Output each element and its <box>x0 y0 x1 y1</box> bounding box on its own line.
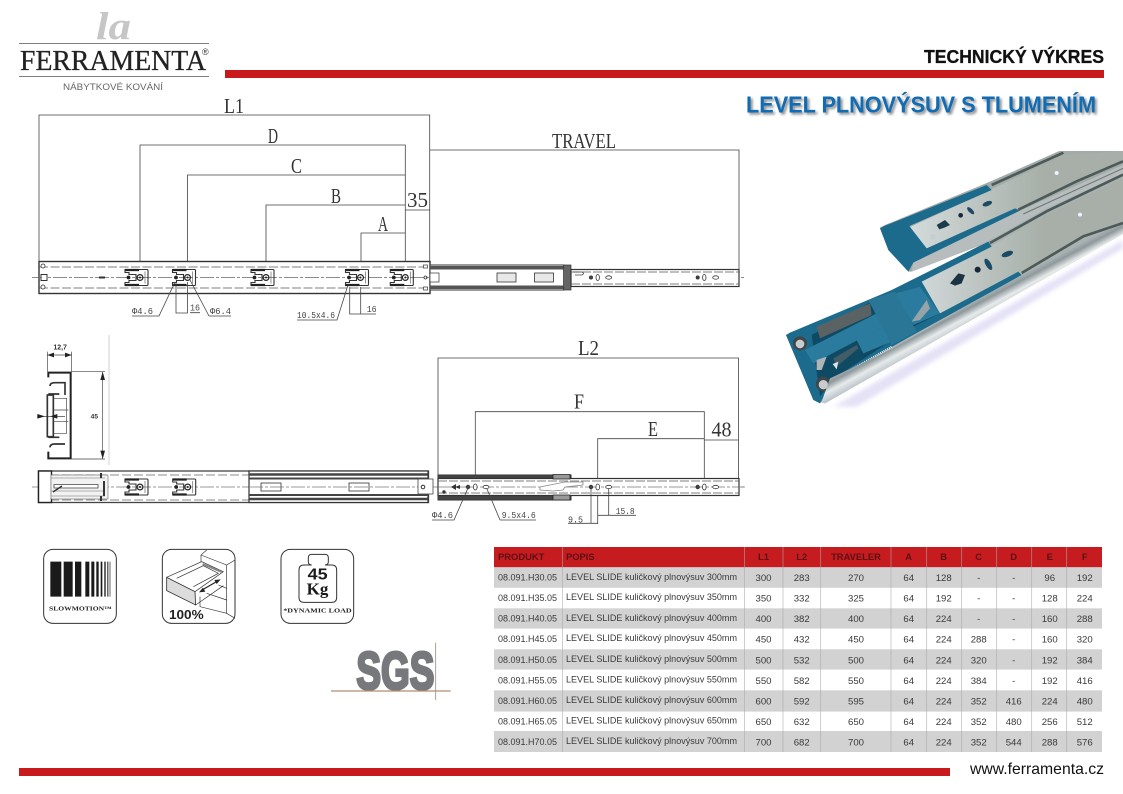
row H70: 576 <box>1077 738 1093 748</box>
table header <box>494 547 1102 567</box>
row H45: 288 <box>971 634 987 646</box>
row H40 <box>498 613 1093 625</box>
icon: slowmotion <box>44 549 116 623</box>
row H30: - <box>1012 573 1015 584</box>
row H40: 382 <box>794 614 810 625</box>
top red bar <box>225 70 1104 78</box>
product title: LEVEL PLNOVÝSUV S TLUMENÍM <box>748 92 1098 120</box>
product photo: drawer slides <box>786 151 1123 407</box>
row H35: 325 <box>848 594 864 604</box>
logo: la Ferramenta: la <box>96 5 131 48</box>
logo: la Ferramenta: ® <box>202 47 209 57</box>
row H45: 450 <box>755 634 772 646</box>
outer rail <box>38 471 428 502</box>
logo: la Ferramenta: FERRAMENTA <box>20 45 206 77</box>
icon: 45 kg dynamic load: *DYNAMIC LOAD <box>283 609 353 615</box>
row H30: LEVEL SLIDE kuličkový plnovýsuv 300mm <box>566 572 737 583</box>
middle rail <box>430 265 564 290</box>
hole callouts: 16 <box>367 304 377 315</box>
row H60: 352 <box>971 696 987 708</box>
drawing: cross-section profile: 12,7 <box>53 344 67 351</box>
row H30: 300 <box>755 573 772 584</box>
hole callouts <box>432 488 636 526</box>
upper slide <box>880 151 1123 272</box>
hole callouts: 9.5 <box>568 514 583 526</box>
row H65: 512 <box>1077 717 1093 728</box>
dimension lines <box>438 358 738 524</box>
row H30: 283 <box>794 573 810 584</box>
row H30: - <box>977 573 980 584</box>
row H45: 64 <box>903 634 915 646</box>
dimension labels: E <box>648 417 658 441</box>
website address: www.ferramenta.cz <box>969 761 1104 778</box>
hole callouts: Φ6.4 <box>210 306 231 317</box>
hole callouts: Φ4.6 <box>432 510 453 521</box>
inner rails <box>438 474 745 500</box>
row H50: 384 <box>1077 656 1093 666</box>
row H30: 96 <box>1044 573 1055 584</box>
row H50: 224 <box>936 656 952 666</box>
row H35: 192 <box>936 594 952 604</box>
dimension labels: C <box>291 154 302 178</box>
row H30: 270 <box>848 573 864 584</box>
hole callouts <box>132 280 377 321</box>
row H55: 550 <box>755 676 772 687</box>
icon: 45 kg dynamic load: Kg <box>307 579 329 598</box>
dimension labels: A <box>378 212 389 236</box>
dimension lines <box>39 115 739 293</box>
row H65: 64 <box>903 717 915 728</box>
specification table <box>494 547 1102 752</box>
row H70: 224 <box>936 738 952 748</box>
row H65: 650 <box>755 717 772 728</box>
heading: technický výkres: TECHNICKÝ VÝKRES <box>924 46 1104 67</box>
bottom red bar <box>19 768 950 776</box>
row H30: 128 <box>936 573 952 584</box>
damper end <box>51 473 108 501</box>
dimension labels: F <box>574 390 584 414</box>
table header: L1 <box>758 551 769 562</box>
row H50: 500 <box>848 656 864 666</box>
logo: la Ferramenta: NÁBYTKOVÉ KOVÁNÍ <box>63 82 163 93</box>
row H60: 64 <box>903 696 915 708</box>
row H50: 64 <box>903 656 915 666</box>
drawing: cross-section profile: 45 <box>91 414 98 421</box>
hole callouts: Φ4.6 <box>132 306 153 317</box>
row H40: 288 <box>1077 614 1093 625</box>
logo: la Ferramenta <box>19 5 209 93</box>
row H70: 64 <box>903 738 915 748</box>
hole callouts: 16 <box>190 302 200 314</box>
row H70: 352 <box>971 738 987 748</box>
dimension labels <box>224 94 616 236</box>
row H50: 500 <box>755 656 772 666</box>
icon: 100% extension: 100% <box>169 608 204 622</box>
row H50: - <box>1012 656 1015 666</box>
row H30 <box>498 572 1093 584</box>
hole callouts: 10.5x4.6 <box>297 310 335 321</box>
row H30: 64 <box>903 573 915 584</box>
dimension labels: B <box>331 184 341 208</box>
logo: SGS <box>331 642 451 701</box>
row H65: 256 <box>1042 717 1058 728</box>
row H40: 64 <box>903 614 915 625</box>
dimension labels: 48 <box>712 418 732 442</box>
dimension labels: D <box>268 124 278 148</box>
damper cavity <box>793 287 940 397</box>
row H60: LEVEL SLIDE kuličkový plnovýsuv 600mm <box>566 695 737 706</box>
row H35: 224 <box>1077 594 1093 604</box>
row H35: LEVEL SLIDE kuličkový plnovýsuv 350mm <box>566 592 737 603</box>
row H35 <box>498 592 1093 604</box>
table header: L2 <box>796 551 807 562</box>
row H60 <box>498 695 1093 708</box>
row H65: 650 <box>848 717 864 728</box>
icon: 45 kg dynamic load <box>281 549 354 623</box>
row H50: LEVEL SLIDE kuličkový plnovýsuv 500mm <box>566 654 737 665</box>
row H60: 595 <box>848 696 864 708</box>
lower slide <box>786 173 1123 403</box>
row H45 <box>498 633 1093 646</box>
row H60: 224 <box>936 696 952 708</box>
row H70: LEVEL SLIDE kuličkový plnovýsuv 700mm <box>566 736 737 747</box>
icon: slowmotion: SLOWMOTION™ <box>49 607 112 613</box>
row H60: 08.091.H60.05 <box>498 696 557 707</box>
row H65: 480 <box>1006 717 1022 728</box>
row H65: 352 <box>971 717 987 728</box>
row H40: - <box>977 614 980 625</box>
row H45: 450 <box>848 634 864 646</box>
row H50: 08.091.H50.05 <box>498 655 557 666</box>
row H55: - <box>1012 676 1015 687</box>
row H45: 432 <box>794 634 810 646</box>
row H65: 224 <box>936 717 952 728</box>
dimension labels <box>574 336 732 442</box>
drawing: cross-section profile <box>37 335 109 465</box>
row H60: 600 <box>755 696 772 708</box>
table header: F <box>1082 551 1088 562</box>
row H35: 332 <box>794 594 810 604</box>
dimension labels: L2 <box>578 336 599 360</box>
row H60: 416 <box>1006 696 1022 708</box>
row H60: 224 <box>1042 696 1058 708</box>
icons and SGS mark <box>44 549 451 701</box>
hole callouts: 15.8 <box>616 506 635 517</box>
row H45: 320 <box>1077 634 1093 646</box>
icon: 100% extension <box>162 549 235 623</box>
dimension labels: L1 <box>224 94 244 118</box>
table header: B <box>940 551 947 562</box>
row H70: 288 <box>1042 738 1058 748</box>
row H55: 224 <box>936 676 952 687</box>
row H30: 192 <box>1077 573 1093 584</box>
table header: TRAVELER <box>831 551 881 562</box>
table header: POPIS <box>566 551 595 562</box>
row H45: LEVEL SLIDE kuličkový plnovýsuv 450mm <box>566 633 737 644</box>
logo: SGS: SGS <box>356 642 434 701</box>
row H70: 700 <box>848 738 864 748</box>
row H50 <box>498 654 1093 666</box>
row H40: - <box>1012 614 1015 625</box>
drawing: extended slide side view <box>32 336 745 526</box>
table header: E <box>1047 551 1053 562</box>
row H35: - <box>1012 594 1015 604</box>
row H55: 416 <box>1077 676 1093 687</box>
product title: LEVEL PLNOVÝSUV S TLUMENÍM <box>746 90 1096 118</box>
row H40: 400 <box>848 614 864 625</box>
dimension labels: TRAVEL <box>552 129 616 153</box>
row H45: 160 <box>1042 634 1058 646</box>
row H55: 192 <box>1042 676 1058 687</box>
middle section <box>249 471 433 502</box>
row H50: 192 <box>1042 656 1058 666</box>
icon: 45 kg dynamic load: 45 <box>308 566 328 583</box>
row H40: 160 <box>1042 614 1058 625</box>
row H55: 08.091.H55.05 <box>498 676 557 686</box>
table row bands <box>494 567 1102 752</box>
row H30: 08.091.H30.05 <box>498 572 557 584</box>
row H45: 224 <box>936 634 952 646</box>
outer rail <box>39 262 430 294</box>
row H45: 08.091.H45.05 <box>498 634 557 645</box>
row H65 <box>498 716 1093 728</box>
table header: D <box>1010 551 1017 562</box>
row H35: - <box>977 594 980 604</box>
row H70: 700 <box>755 738 772 748</box>
dimension labels: 35 <box>407 188 428 212</box>
row H40: 224 <box>936 614 952 625</box>
row H55: 64 <box>903 676 915 687</box>
inner rail <box>571 270 739 286</box>
row H70 <box>498 736 1093 748</box>
table header: C <box>975 551 982 562</box>
row H65: 632 <box>794 717 810 728</box>
row H65: 08.091.H65.05 <box>498 716 557 728</box>
row H60: 592 <box>794 696 810 708</box>
table header: A <box>905 551 912 562</box>
row H55: LEVEL SLIDE kuličkový plnovýsuv 550mm <box>566 674 737 686</box>
row H35: 128 <box>1042 594 1058 604</box>
row H55: 550 <box>848 676 864 687</box>
row H55: 384 <box>971 676 987 687</box>
row H70: 544 <box>1006 738 1022 748</box>
row H35: 08.091.H35.05 <box>498 593 557 604</box>
row H45: - <box>1012 634 1015 646</box>
row H70: 08.091.H70.05 <box>498 737 557 748</box>
row H35: 64 <box>903 594 915 604</box>
table header: PRODUKT <box>498 551 545 562</box>
row H50: 532 <box>794 656 810 666</box>
row H35: 350 <box>755 594 772 604</box>
row H65: LEVEL SLIDE kuličkový plnovýsuv 650mm <box>566 716 737 726</box>
hole callouts: 9.5x4.6 <box>502 510 536 521</box>
row H55: 582 <box>794 676 810 687</box>
row H70: 682 <box>794 738 810 748</box>
row H40: 400 <box>755 614 772 625</box>
row H40: 08.091.H40.05 <box>498 614 557 624</box>
row H55 <box>498 674 1093 687</box>
row H40: LEVEL SLIDE kuličkový plnovýsuv 400mm <box>566 613 737 624</box>
row H50: 320 <box>971 656 987 666</box>
drawing: closed slide side view <box>32 94 745 321</box>
row H60: 480 <box>1077 696 1093 708</box>
